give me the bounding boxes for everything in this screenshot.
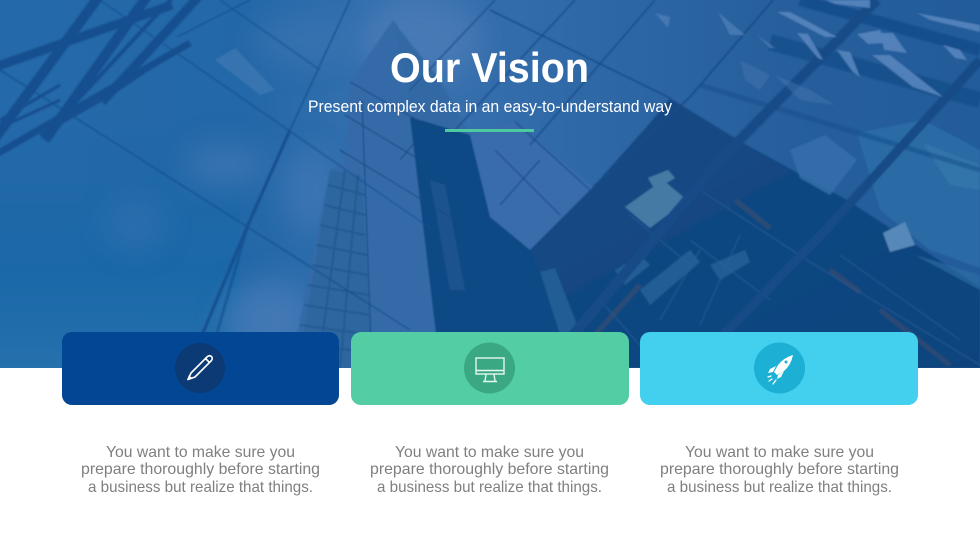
text block: pencil card caption: prepare thoroughly before starting: [81, 461, 320, 478]
subtitle: Present complex data in an easy-to-understand way: [308, 97, 672, 116]
text block: rocket card caption: a business but realize that things.: [667, 479, 892, 496]
glass panels above the dark structure's edge: [790, 120, 980, 290]
text block: rocket card caption: You want to make sure you: [685, 444, 874, 461]
tower, dark face: [410, 117, 575, 368]
text block: pencil card caption: [81, 444, 320, 496]
text block: monitor card caption: You want to make sure you: [395, 444, 584, 461]
icon: rocket: [754, 342, 805, 394]
title: Our Vision: [390, 44, 589, 91]
light window cluster: [625, 170, 687, 228]
icon: pencil: [175, 343, 225, 393]
text block: pencil card caption: a business but realize that things.: [88, 479, 313, 496]
text block: monitor card caption: [370, 444, 609, 496]
background photo: glass skyscrapers with blue tint: [0, 0, 980, 368]
card background: green: [351, 332, 629, 405]
text block: pencil card caption: You want to make sure you: [106, 444, 295, 461]
card background: sky blue: [640, 332, 918, 405]
left truss beams: [0, 0, 200, 155]
panel: rocket card: [640, 332, 918, 405]
title accent bar: [445, 129, 534, 132]
text block: rocket card caption: prepare thoroughly before starting: [660, 461, 899, 478]
glass panel right of dark face: [470, 122, 593, 250]
panel: monitor card: [351, 332, 629, 405]
light skylight panes, upper right: [655, 0, 980, 97]
tower, lit left side: [298, 22, 436, 332]
icon: monitor: [464, 342, 515, 394]
text block: rocket card caption: [660, 444, 899, 496]
text block: monitor card caption: a business but realize that things.: [377, 479, 602, 496]
long thin glass lines: [0, 0, 430, 340]
text block: monitor card caption: prepare thoroughly before starting: [370, 461, 609, 478]
lower right dark structure: [490, 98, 980, 368]
panel: pencil card: [62, 332, 339, 405]
diagonal dark frames on right: [410, 0, 980, 335]
tower lattice: [298, 170, 373, 368]
card background: navy: [62, 332, 339, 405]
